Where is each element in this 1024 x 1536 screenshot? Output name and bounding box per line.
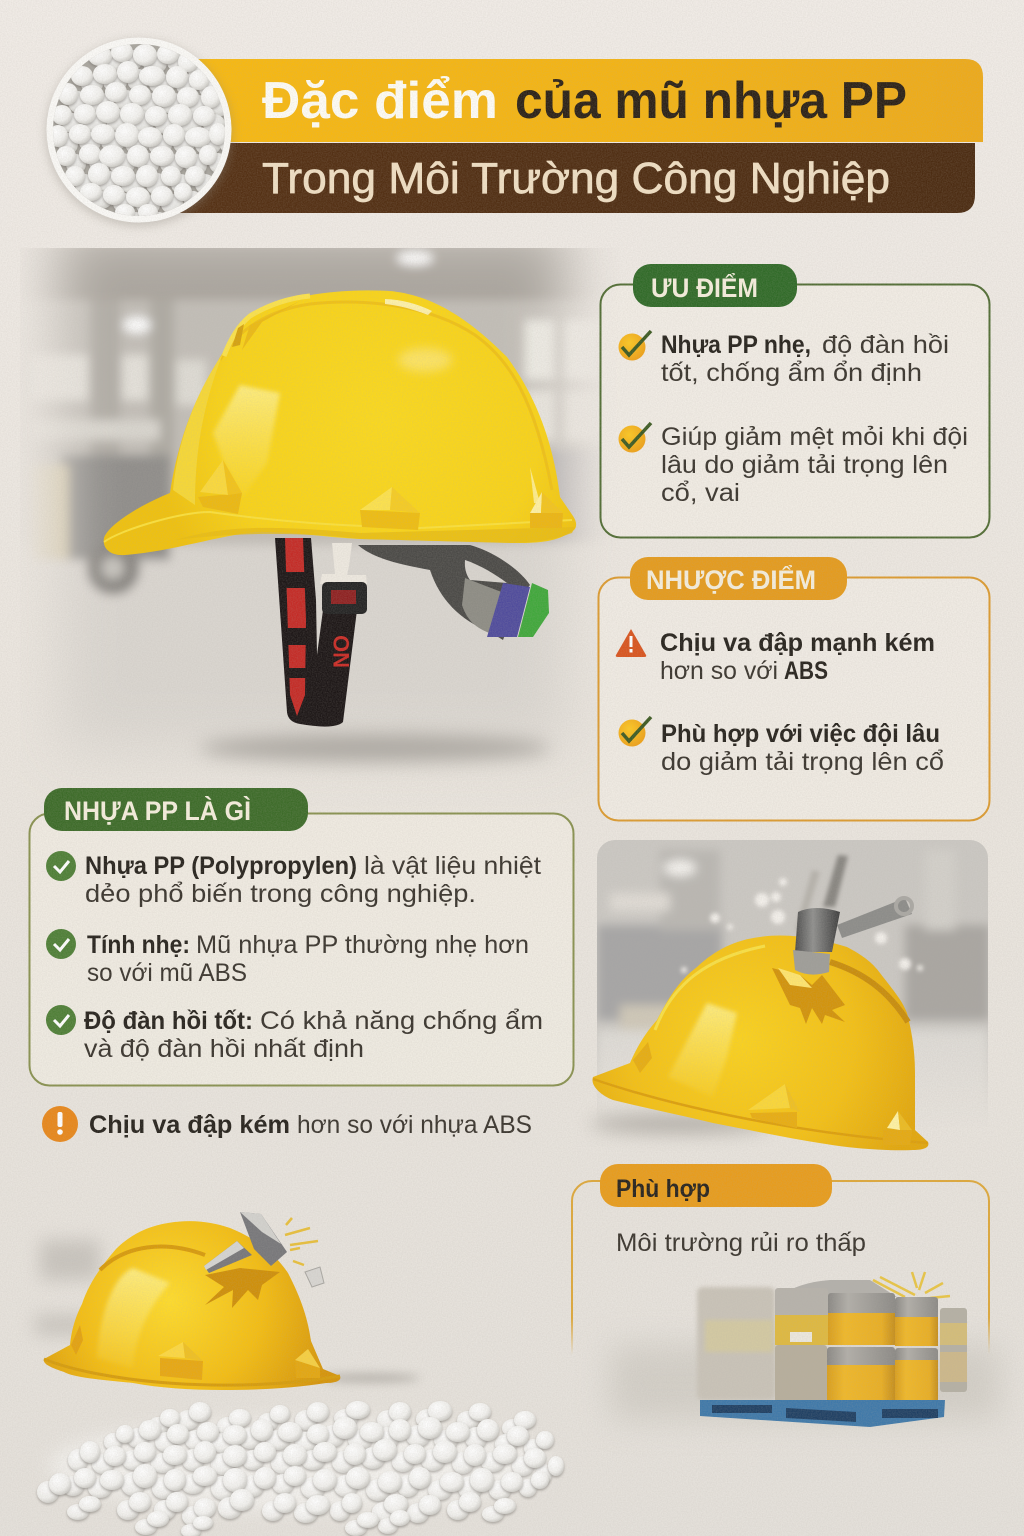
ground shadow [590, 1115, 770, 1133]
text: advantage 2: lâu do giảm tải trọng lên [661, 451, 948, 479]
text: definition: Nhựa PP (Polypropylen) [85, 852, 357, 880]
photo: factory background behind main helmet [28, 248, 598, 754]
helmet studs [71, 1325, 320, 1380]
text: disadvantage 1 [660, 629, 935, 685]
icon: check 3 [618, 717, 651, 746]
title line 1 [262, 72, 907, 130]
panel: Nhược điểm [598, 557, 990, 820]
heading pill: Phù hợp: Phù hợp [616, 1175, 710, 1203]
text: elasticity [84, 1007, 543, 1063]
dusty ground [610, 1345, 1000, 1420]
pallet [700, 1400, 945, 1427]
text: definition: dẻo phổ biến trong công nghiệp. [85, 880, 476, 908]
PP pellets pile [37, 1401, 564, 1536]
text: low risk environment: Môi trường rủi ro thấp [616, 1229, 866, 1257]
shell ridge and crack [593, 946, 928, 1143]
text: disadvantage 1: Chịu va đập mạnh kém [660, 629, 935, 657]
text: light weight: so với mũ ABS [87, 959, 247, 987]
chin strap [275, 538, 367, 727]
icon: green check 3 [46, 1005, 76, 1035]
text: advantage 2 [661, 423, 968, 507]
hammer motion handle [795, 855, 848, 930]
text: disadvantage 2 [661, 720, 944, 776]
text: advantage 1 [661, 331, 949, 387]
banner brown strip [170, 143, 975, 213]
hammer head [793, 898, 912, 975]
text: definition: là vật liệu nhiệt [364, 852, 541, 880]
heading pill: Nhược điểm: NHƯỢC ĐIỂM [646, 564, 816, 595]
icon: warning triangle [616, 629, 646, 657]
heading pill: Nhược điểm [630, 557, 847, 600]
text: light weight [87, 931, 529, 987]
text: definition [85, 852, 541, 908]
panel: Phù hợp [571, 1164, 1004, 1427]
text: elasticity: Có khả năng chống ẩm [260, 1007, 543, 1035]
title line 2: Trong Môi Trường Công Nghiệp [262, 154, 890, 203]
helmet shadow [200, 734, 550, 762]
text: elasticity: và độ đàn hồi nhất định [84, 1035, 364, 1063]
cracked helmet [44, 1221, 340, 1390]
chin strap: NO [329, 635, 354, 668]
motion blur [35, 1240, 100, 1335]
callout: impact warning [42, 1106, 532, 1142]
harness [358, 545, 549, 640]
shell highlights [213, 348, 540, 503]
text: disadvantage 2: Phù hợp với việc đội lâu [661, 720, 940, 748]
title line 1: của mũ nhựa PP [515, 72, 907, 130]
helmet studs [198, 460, 563, 530]
helmet shell [104, 290, 576, 555]
icon: check 1 [618, 331, 651, 360]
debris particles [681, 878, 923, 973]
text: disadvantage 2: do giảm tải trọng lên cổ [661, 748, 944, 776]
illustration: main yellow helmet [104, 290, 576, 762]
drums [697, 1280, 967, 1406]
impact sparks [873, 1272, 950, 1298]
illustration: hammer hitting helmet [590, 840, 990, 1160]
icon: PP pellets circle [46, 38, 237, 228]
text: advantage 1: tốt, chống ẩm ổn định [661, 359, 922, 387]
text: advantage 1: Nhựa PP nhẹ, [661, 331, 811, 359]
banner title [170, 59, 983, 213]
callout: impact warning: hơn so với nhựa ABS [297, 1111, 532, 1139]
panel: Ưu điểm [600, 264, 990, 538]
icon: exclamation [42, 1106, 78, 1142]
photo backdrop [597, 840, 988, 1090]
text: elasticity: Độ đàn hồi tốt: [84, 1007, 253, 1035]
heading pill: Phù hợp [600, 1164, 832, 1207]
highlights and crack [44, 1247, 340, 1385]
text: advantage 1: độ đàn hồi [822, 331, 949, 359]
text: advantage 2: Giúp giảm mệt mỏi khi đội [661, 423, 968, 451]
hammer [204, 1212, 287, 1273]
panel outline [571, 1180, 990, 1353]
icon: check 2 [618, 423, 651, 452]
banner yellow strip [190, 59, 983, 142]
icon: green check 1 [46, 851, 76, 881]
callout: impact warning: Chịu va đập kém [89, 1111, 290, 1139]
text: disadvantage 1: ABS [784, 657, 828, 685]
text: light weight: Tính nhẹ: [87, 931, 190, 959]
heading pill: Ưu điểm [633, 264, 797, 307]
heading pill: Nhựa PP là gì [44, 788, 308, 831]
illustration: drums on pallet [610, 1272, 1000, 1427]
icon: green check 2 [46, 929, 76, 959]
text: advantage 2: cổ, vai [661, 479, 740, 507]
panel: Nhựa PP là gì [30, 788, 574, 1086]
text: light weight: Mũ nhựa PP thường nhẹ hơn [196, 931, 529, 959]
heading pill: Ưu điểm: ƯU ĐIỂM [651, 272, 758, 303]
title line 1: Đặc điểm [262, 72, 498, 130]
helmet studs [633, 1042, 912, 1145]
impact sparks and debris [285, 1218, 324, 1287]
cracked helmet [592, 935, 928, 1150]
text: disadvantage 1: hơn so với [660, 657, 778, 685]
illustration: helmet and pellets [35, 1212, 564, 1536]
heading pill: Nhựa PP là gì: NHỰA PP LÀ GÌ [64, 795, 251, 826]
shell ridges [104, 296, 575, 543]
